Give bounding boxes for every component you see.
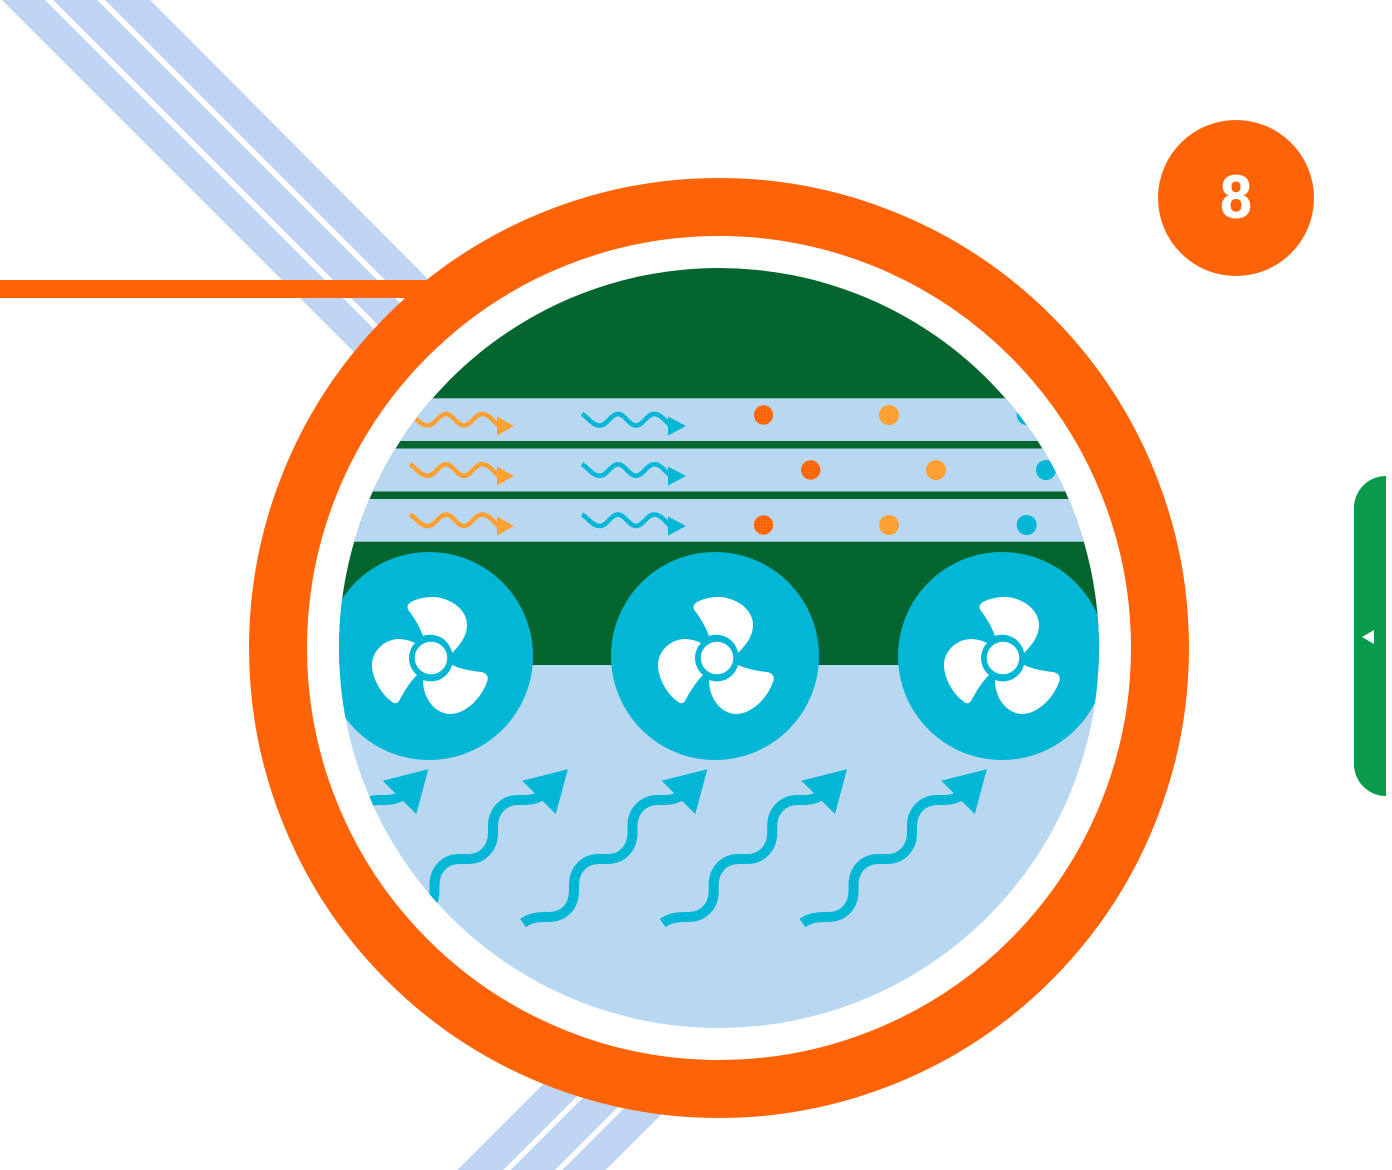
fan centre [611,552,819,760]
fan left [325,552,533,760]
diagonal stripes upper left [2,0,548,400]
air channels [339,398,1099,542]
inner scene [339,268,1099,1028]
rising air arrows [369,769,987,928]
green side tab [1354,476,1386,796]
blue wavy arrows [582,414,686,536]
orange connector line [0,280,440,298]
number badge: 8 [1220,165,1252,231]
icon: tab arrow [1362,630,1374,644]
fan right [898,552,1106,760]
orange ring [278,207,1160,1089]
number badge [1158,120,1314,276]
background: green upper and light blue lower [339,268,1099,1028]
orange wavy arrows [410,414,514,536]
particle dots [754,405,1056,535]
diagonal stripes bottom [457,1070,706,1170]
